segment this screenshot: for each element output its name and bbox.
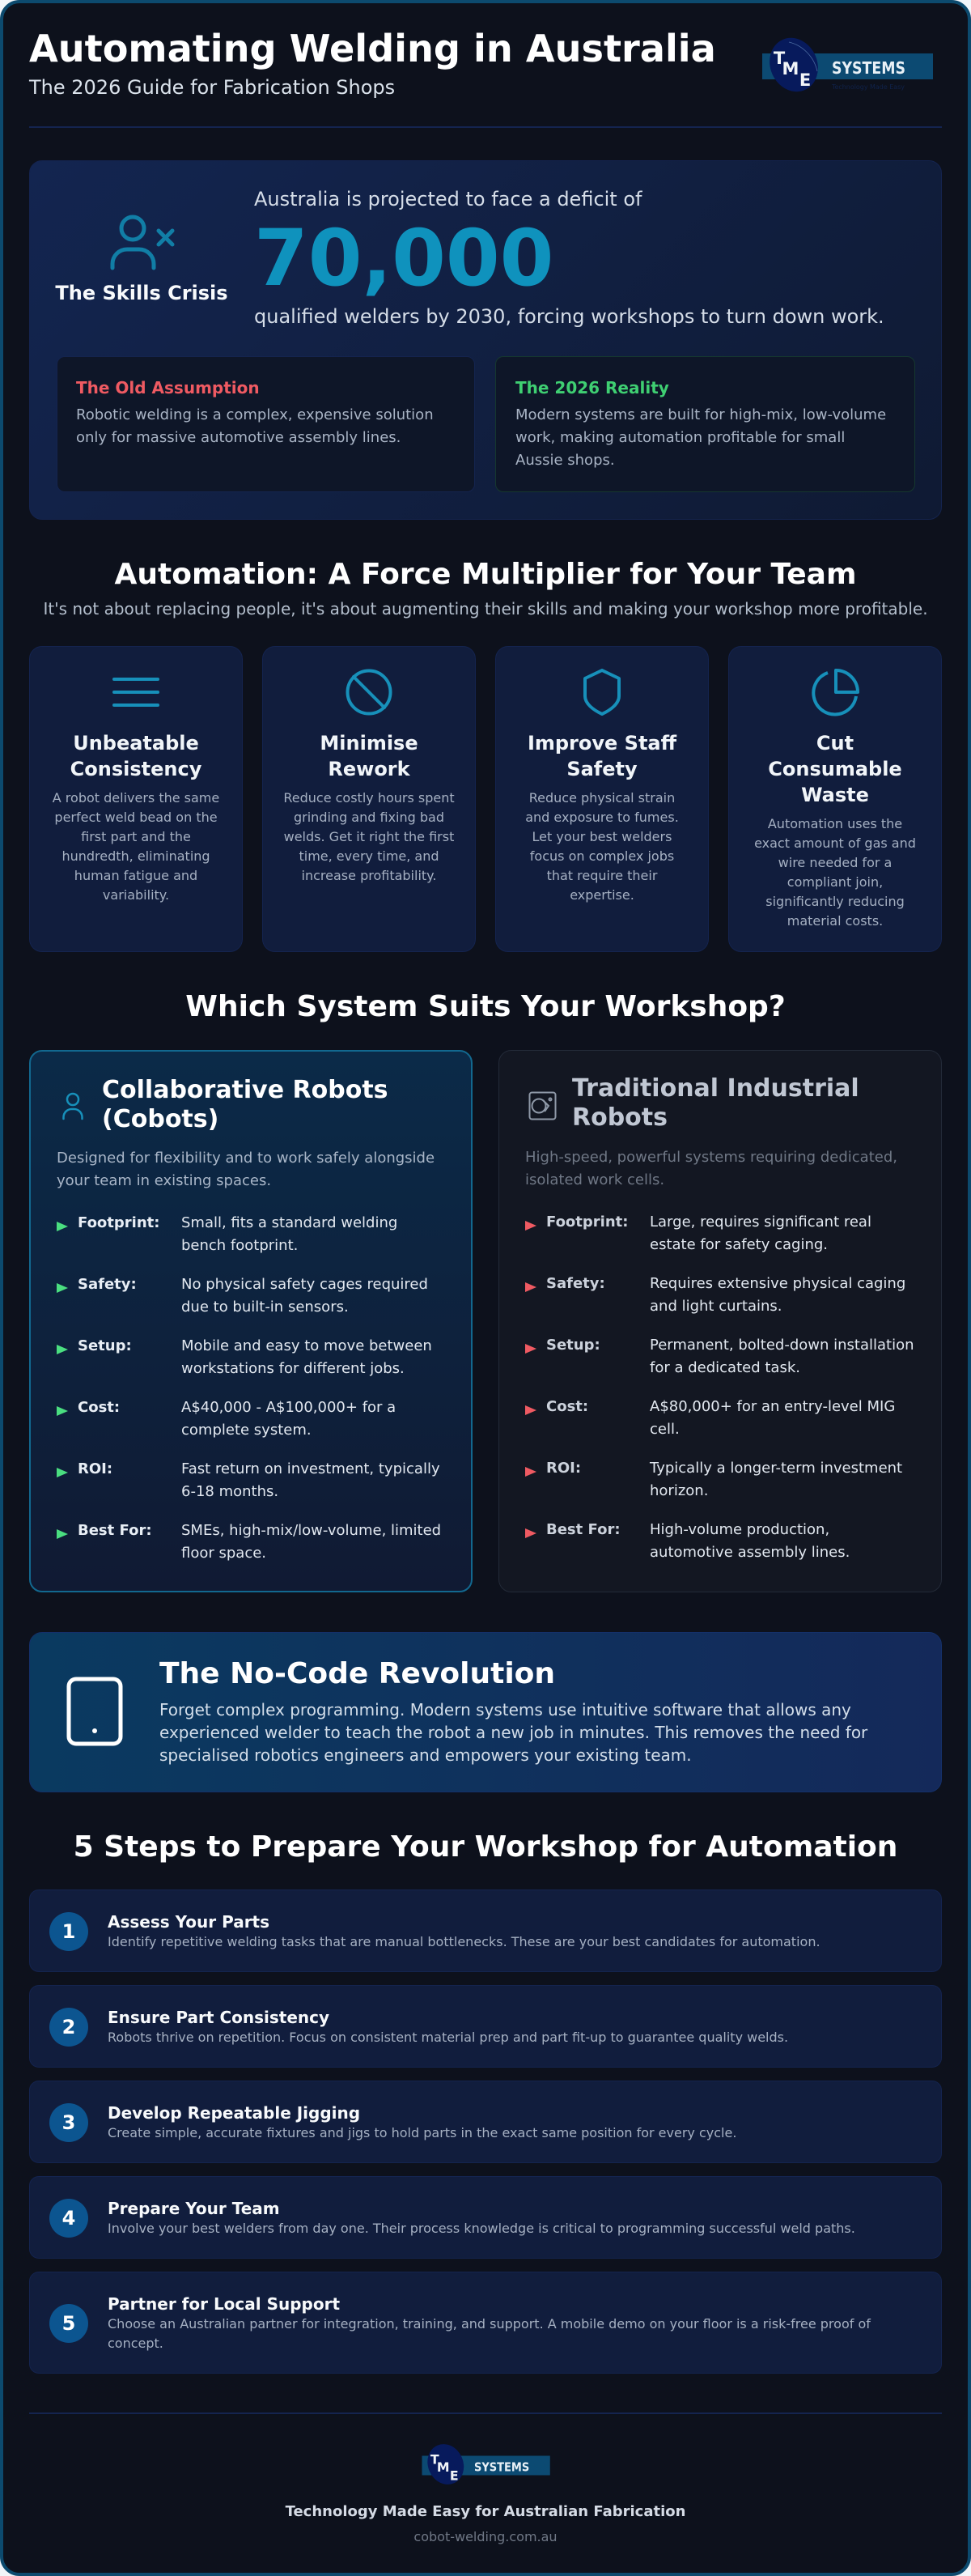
logo: TME Systems: E [799,70,811,90]
panel: traditional robots [498,1050,942,1592]
row: roi [57,1460,440,1500]
card text: first part and the [81,829,191,844]
card text: grinding and fixing bad [294,810,444,825]
card text [283,790,455,883]
row: footprint: Footprint: [546,1214,628,1231]
row: footprint: Footprint: [78,1214,159,1231]
title: Automating Welding in Australia [29,27,716,70]
step text: Robots thrive on repetition. Focus on consistent material prep and part fit-up to guarantee quality welds. [108,2030,788,2045]
row: roi: ROI: [78,1460,112,1477]
card: consistency [29,646,243,952]
card text: and exposure to fumes. [525,810,679,825]
text: traditional description [525,1149,897,1188]
step text: concept. [108,2336,163,2351]
footer logo [422,2444,550,2485]
number badge: 2 [62,2016,75,2038]
row: cost: Cost: [546,1398,588,1415]
card text: compliant join, [787,874,883,890]
row: cost: A$40,000 - A$100,000+ for a [181,1399,396,1416]
card heading: Unbeatable [73,732,199,755]
row: roi: Typically a longer-term investment [650,1460,902,1477]
row: footprint [57,1214,397,1254]
card text: exact amount of gas and [754,835,916,851]
card text: human fatigue and [74,868,197,883]
heading: cobots: Collaborative Robots [102,1076,388,1104]
text: deficit intro: Australia is projected to face a deficit of [254,188,642,210]
row: safety [57,1276,428,1316]
subheading: force multiplier: It's not about replacing people, it's about augmenting their skills and making your workshop more profitable. [43,599,928,618]
row: safety: due to built-in sensors. [181,1299,349,1316]
footer tagline: Technology Made Easy for Australian Fabrication [286,2503,685,2520]
heading: cobots [102,1076,388,1133]
number badge: 4 [62,2207,75,2230]
icon: tablet [66,1677,123,1745]
heading: traditional robots: Robots [572,1103,668,1132]
step title: Prepare Your Team [108,2199,280,2218]
logo: TME Systems [762,37,933,92]
logo: TME Systems: Technology Made Easy [831,83,905,91]
step 2 [29,1985,942,2068]
heading: traditional robots: Traditional Industrial [572,1074,859,1103]
row: safety: and light curtains. [650,1298,782,1315]
card heading [768,732,902,806]
text: 2026 reality body: Aussie shops. [515,452,615,469]
panel: no-code revolution [29,1632,942,1792]
text: welders by 2030: qualified welders by 2030, forcing workshops to turn down work. [254,305,884,328]
row: setup: for a dedicated task. [650,1359,800,1376]
row: best for: automotive assembly lines. [650,1544,850,1561]
step text: Create simple, accurate fixtures and jigs to hold parts in the exact same position for every cycle. [108,2125,736,2140]
card text: Automation uses the [768,816,902,831]
card heading [320,732,418,780]
icon: shield [583,669,621,716]
text: old assumption body [76,406,434,446]
card text: welds. Get it right the first [284,829,454,844]
row: cost: cell. [650,1421,680,1438]
row: setup: Setup: [546,1337,600,1354]
panel: old assumption [57,356,475,492]
card: safety [495,646,709,952]
step 1 [29,1889,942,1972]
card heading: Improve Staff [528,732,676,755]
text: no-code body [159,1700,867,1765]
card heading: Consumable [768,758,902,780]
row: safety: Safety: [78,1276,137,1293]
icon: no symbol [346,669,392,716]
card text: Reduce physical strain [529,790,675,806]
step title: Develop Repeatable Jigging [108,2103,360,2123]
card text: wire needed for a [778,855,892,870]
heading: the skills crisis: The Skills Crisis [55,282,228,304]
card text: Let your best welders [532,829,672,844]
row: footprint: estate for safety caging. [650,1236,828,1253]
row: cost: Cost: [78,1399,120,1416]
card text: significantly reducing [765,894,905,909]
number badge: 5 [62,2312,75,2335]
card heading: Consistency [70,758,201,780]
step 4 [29,2176,942,2259]
row: best for [525,1521,850,1561]
icon: person with x [110,215,175,270]
heading: which system: Which System Suits Your Workshop? [185,990,786,1023]
card text [52,790,219,903]
footer logo: E [450,2468,459,2484]
heading: traditional robots [572,1074,859,1132]
footer logo: SYSTEMS [474,2459,529,2474]
card text: time, every time, and [299,848,439,864]
card text: material costs. [787,913,883,929]
row: setup [525,1337,914,1376]
panel: skills crisis [29,160,942,520]
text: old assumption body: Robotic welding is a complex, expensive solution [76,406,434,423]
footer url: cobot-welding.com.au [413,2529,558,2544]
row: footprint: bench footprint. [181,1237,298,1254]
step text: Involve your best welders from day one. Their process knowledge is critical to programming successful weld paths. [108,2221,855,2236]
card heading [70,732,201,780]
card text: hundredth, eliminating [61,848,210,864]
heading: 5 steps: 5 Steps to Prepare Your Workshop for Automation [74,1830,897,1864]
text: cobots description [57,1150,435,1189]
row: footprint [525,1214,871,1253]
number badge: 1 [62,1920,75,1943]
panel: 2026 reality [495,356,915,492]
heading: old assumption: The Old Assumption [76,378,260,397]
footer logo: M [437,2459,450,2475]
text: traditional description: isolated work cells. [525,1171,664,1188]
row: best for: Best For: [546,1521,621,1538]
card text [525,790,679,903]
row: roi: 6-18 months. [181,1483,278,1500]
text: old assumption body: only for massive automotive assembly lines. [76,429,401,446]
step text: Choose an Australian partner for integration, training, and support. A mobile demo on your floor is a risk-free proof of [108,2316,871,2332]
row: best for [57,1522,441,1562]
card heading: Rework [328,758,410,780]
card text [754,816,916,929]
text: no-code body: experienced welder to teach the robot a new job in minutes. This removes the need for [159,1723,867,1742]
text: 2026 reality body: work, making automation profitable for small [515,429,845,446]
card text: variability. [103,887,169,903]
icon: lines [112,678,159,707]
step title: Ensure Part Consistency [108,2008,329,2027]
number badge [49,2103,88,2142]
icon: person [62,1093,83,1120]
text: cobots description: Designed for flexibility and to work safely alongside [57,1150,435,1167]
row: roi [525,1460,902,1499]
step 3 [29,2081,942,2163]
logo: TME Systems: SYSTEMS [832,58,905,78]
header [29,27,933,99]
row: cost: A$80,000+ for an entry-level MIG [650,1398,895,1415]
row: setup [57,1337,432,1377]
row: roi: horizon. [650,1482,708,1499]
card text: A robot delivers the same [53,790,219,806]
number badge [49,2199,88,2238]
row: footprint: Small, fits a standard welding [181,1214,397,1231]
text: traditional description: High-speed, powerful systems requiring dedicated, [525,1149,897,1166]
text: 2026 reality body: Modern systems are built for high-mix, low-volume [515,406,886,423]
row: best for: SMEs, high-mix/low-volume, limited [181,1522,441,1539]
card heading: Waste [801,784,869,806]
row: safety: Safety: [546,1275,605,1292]
card text: that require their [547,868,657,883]
row: best for: Best For: [78,1522,152,1539]
row: cost [57,1399,396,1439]
icon: industrial robot [529,1091,557,1120]
heading: 2026 reality: The 2026 Reality [515,378,669,397]
card text: perfect weld bead on the [54,810,218,825]
row: cost [525,1398,895,1438]
logo: TME Systems: T [774,49,786,68]
card text: focus on complex jobs [530,848,674,864]
card heading: Minimise [320,732,418,755]
text: 2026 reality body [515,406,886,469]
step title: Assess Your Parts [108,1912,269,1932]
row: footprint: Large, requires significant real [650,1214,871,1231]
row: setup: Setup: [78,1337,132,1354]
stat: 70,000: 70,000 [254,213,553,304]
icon: pie chart [812,669,859,716]
card: rework [262,646,476,952]
row: setup: workstations for different jobs. [181,1360,405,1377]
card heading [528,732,676,780]
card text: increase profitability. [302,868,436,883]
card heading: Safety [566,758,638,780]
footer logo: T [430,2451,439,2467]
subtitle: The 2026 Guide for Fabrication Shops [29,76,395,99]
text: cobots description: your team in existing spaces. [57,1172,271,1189]
row: best for: High-volume production, [650,1521,829,1538]
row: best for: floor space. [181,1545,266,1562]
card: waste [728,646,942,952]
footer [285,2444,685,2544]
text: no-code body: Forget complex programming. Modern systems use intuitive software that allows any [159,1700,851,1719]
step text [108,2316,871,2351]
row: cost: complete system. [181,1422,312,1439]
step text: Identify repetitive welding tasks that are manual bottlenecks. These are your best candidates for automation. [108,1934,820,1949]
heading: force multiplier: Automation: A Force Multiplier for Your Team [115,558,856,591]
number badge [49,2304,88,2343]
number badge [49,1912,88,1951]
card text: Reduce costly hours spent [283,790,455,806]
row: setup: Mobile and easy to move between [181,1337,432,1354]
logo: TME Systems: M [782,59,799,79]
card text: expertise. [570,887,634,903]
text: no-code body: specialised robotics engineers and empowers your existing team. [159,1745,692,1765]
row: roi: ROI: [546,1460,581,1477]
step 5 [29,2272,942,2374]
step title: Partner for Local Support [108,2294,340,2314]
number badge: 3 [62,2111,75,2134]
card heading: Cut [816,732,854,755]
row: safety: Requires extensive physical caging [650,1275,905,1292]
heading: cobots: (Cobots) [102,1105,218,1133]
heading: no-code: The No-Code Revolution [159,1657,555,1690]
row: roi: Fast return on investment, typically [181,1460,440,1477]
number badge [49,2008,88,2047]
row: safety: No physical safety cages required [181,1276,428,1293]
row: setup: Permanent, bolted-down installation [650,1337,914,1354]
panel: cobots [29,1050,473,1592]
row: safety [525,1275,905,1315]
